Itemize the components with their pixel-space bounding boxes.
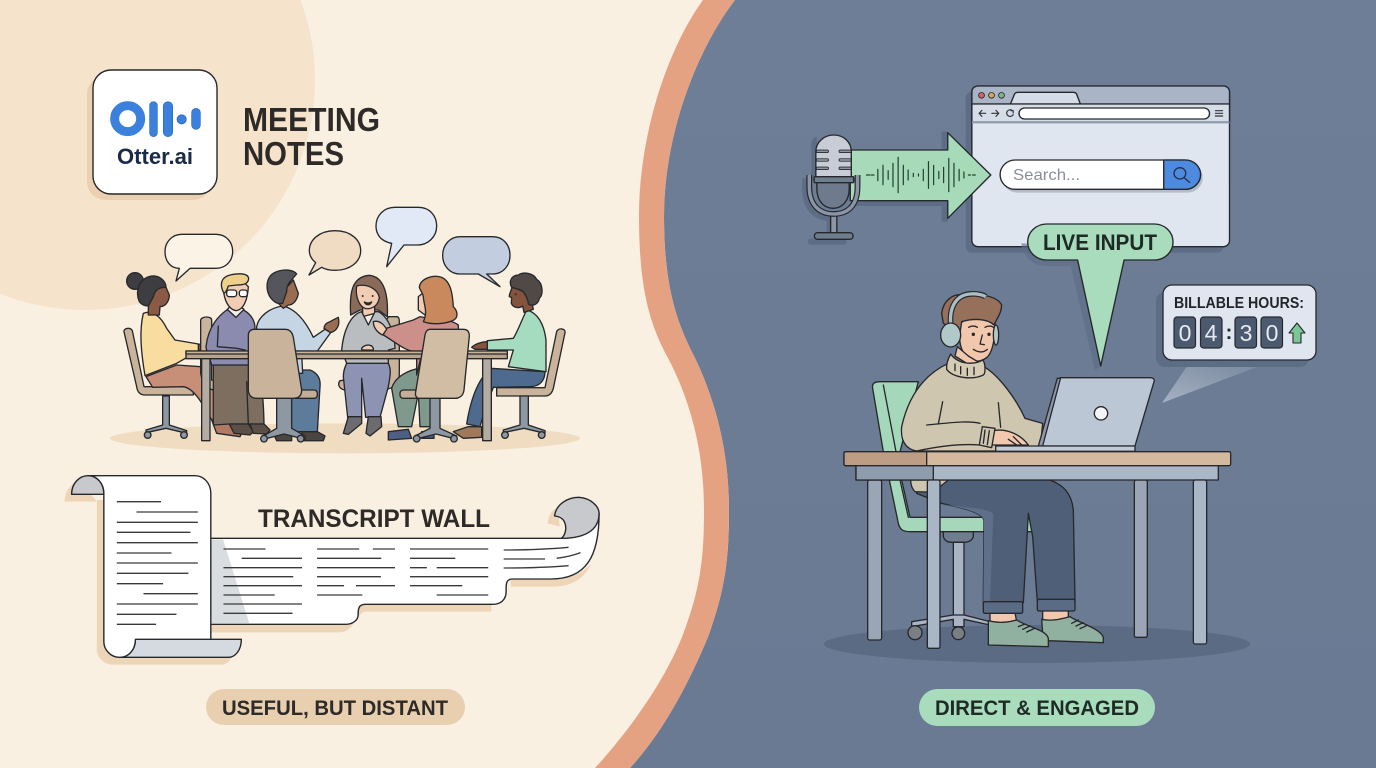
icon: up arrow bbox=[1289, 323, 1305, 343]
scroll: end curl bbox=[555, 497, 599, 538]
timer digits bbox=[1174, 317, 1282, 348]
address bar bbox=[1019, 108, 1210, 119]
scroll: horizontal sheet bbox=[211, 513, 599, 624]
office chair bbox=[872, 382, 1032, 640]
window control dots bbox=[979, 92, 1004, 98]
browser and voice input group bbox=[805, 86, 1230, 370]
person: man in light blue shirt, seen from behind bbox=[257, 270, 339, 441]
icon: studio microphone bbox=[805, 135, 858, 245]
desk front legs bbox=[927, 480, 1207, 648]
heading: transcript wall: TRANSCRIPT WALL bbox=[258, 505, 490, 533]
front chair left bbox=[248, 329, 317, 442]
timer digits: 0 bbox=[1266, 320, 1278, 346]
timer digits: : bbox=[1226, 322, 1232, 344]
scroll: vertical sheet bbox=[88, 476, 211, 657]
live input label: LIVE INPUT bbox=[1043, 230, 1158, 255]
sweater torso bbox=[901, 363, 1043, 451]
speech bubble: white bbox=[165, 234, 233, 281]
icon: otter waveform logo bbox=[115, 102, 200, 137]
search placeholder: Search... bbox=[1013, 167, 1080, 184]
person: woman in yellow bbox=[124, 273, 242, 438]
floor shadow under desk bbox=[824, 625, 1250, 663]
speech bubble: tan bbox=[309, 231, 361, 275]
laptop bbox=[996, 378, 1154, 451]
logo wordmark: Otter.ai bbox=[117, 144, 193, 169]
search box bbox=[1000, 160, 1203, 193]
billable hours timer card bbox=[1156, 285, 1316, 367]
scroll shadow bbox=[65, 482, 591, 665]
conference table bbox=[186, 351, 507, 441]
scroll: top curl bbox=[72, 476, 104, 494]
wavy coral divider bbox=[595, 0, 735, 768]
speech bubble: periwinkle bbox=[443, 237, 510, 287]
label pill: direct and engaged: DIRECT & ENGAGED bbox=[935, 697, 1139, 720]
heading: meeting notes: NOTES bbox=[243, 135, 344, 172]
label pill: direct and engaged bbox=[919, 689, 1155, 726]
person: woman in pink top, auburn hair bbox=[373, 276, 458, 440]
front chair right bbox=[400, 329, 469, 442]
projector beam from timer to laptop bbox=[1162, 362, 1270, 403]
person: woman in grey top, facing viewer bbox=[339, 275, 399, 436]
person: man in purple sweater with glasses bbox=[201, 274, 270, 435]
green arrow with waveform bbox=[850, 132, 991, 222]
desk rear legs bbox=[868, 480, 1147, 640]
panel: slate right background bbox=[630, 0, 1376, 768]
floor shadow bbox=[110, 423, 580, 453]
turtleneck collar bbox=[947, 354, 985, 378]
person working at a laptop bbox=[844, 294, 1231, 648]
timer digits: 3 bbox=[1240, 320, 1252, 346]
person: man in mint sweater bbox=[453, 273, 565, 438]
decorative circle behind logo bbox=[0, 0, 315, 310]
panel: Otter.ai logo card bbox=[87, 70, 217, 200]
desk top and frame bbox=[844, 452, 1231, 480]
heading: meeting notes: MEETING bbox=[243, 101, 380, 138]
hands and cuff bbox=[979, 427, 1028, 448]
heading: meeting notes bbox=[243, 101, 380, 172]
label pill: useful but distant: USEFUL, BUT DISTANT bbox=[222, 697, 448, 720]
panel: cream left background bbox=[0, 0, 760, 768]
browser window bbox=[966, 86, 1230, 253]
timer digits: 0 bbox=[1179, 320, 1191, 346]
trousers bbox=[917, 480, 1075, 603]
timer label: BILLABLE HOURS: bbox=[1174, 295, 1304, 312]
label pill: useful but distant bbox=[206, 689, 465, 725]
timer digits: 4 bbox=[1205, 320, 1218, 346]
icon: magnifier bbox=[1174, 168, 1190, 182]
callout: live input bbox=[1021, 224, 1173, 370]
navigation icons bbox=[979, 110, 1223, 116]
shoes and cuffs bbox=[983, 599, 1103, 647]
transcript text lines bbox=[117, 502, 580, 624]
scroll: bottom curl bbox=[120, 639, 241, 657]
head bbox=[941, 294, 1002, 363]
transcript wall scroll bbox=[65, 476, 599, 665]
scroll: fold shading bbox=[212, 539, 249, 624]
meeting illustration: six people around a table bbox=[110, 207, 580, 453]
speech bubble: pale blue bbox=[376, 207, 437, 267]
